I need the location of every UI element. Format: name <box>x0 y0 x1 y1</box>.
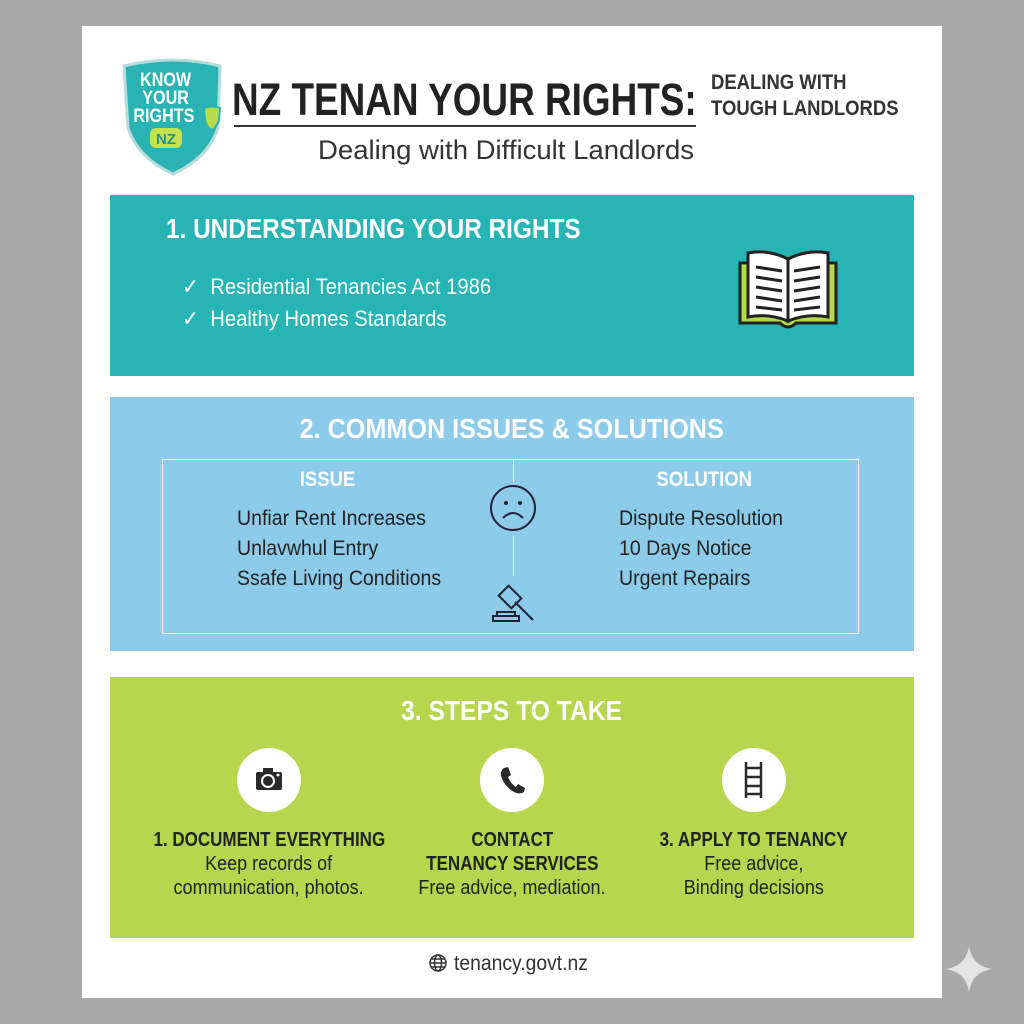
table box <box>162 459 859 634</box>
title: NZ TENAN YOUR RIGHTS: <box>232 74 697 125</box>
step 1: communication, photos. <box>174 877 364 899</box>
panel: steps to take <box>110 677 914 938</box>
step 2 <box>418 748 606 899</box>
issue column: ISSUE <box>300 468 356 491</box>
issue column: Unlavwhul Entry <box>237 537 378 560</box>
card <box>82 26 942 998</box>
icon: sad face <box>490 485 536 531</box>
step 2: CONTACT <box>471 829 553 851</box>
logo badge: KNOW <box>140 69 191 90</box>
step 3: Binding decisions <box>684 877 824 899</box>
checklist: ✓ Healthy Homes Standards <box>182 306 446 331</box>
panel: common issues and solutions <box>110 397 914 651</box>
icon: gavel <box>492 584 534 622</box>
solution column: 10 Days Notice <box>619 537 751 560</box>
step 1 <box>153 748 385 899</box>
heading: 1. UNDERSTANDING YOUR RIGHTS <box>166 213 581 244</box>
step 1: Keep records of <box>205 853 333 875</box>
footer url: tenancy.govt.nz <box>454 952 588 975</box>
solution column: SOLUTION <box>656 468 752 491</box>
step 1: 1. DOCUMENT EVERYTHING <box>153 829 385 851</box>
solution column <box>619 468 783 590</box>
step 3: Free advice, <box>704 853 804 875</box>
solution column: Urgent Repairs <box>619 567 750 590</box>
step 2: Free advice, mediation. <box>418 877 606 899</box>
step 2: TENANCY SERVICES <box>426 853 598 875</box>
logo badge: RIGHTS <box>133 105 195 126</box>
issue column: Unfiar Rent Increases <box>237 507 426 530</box>
logo badge <box>122 58 222 176</box>
step 3: 3. APPLY TO TENANCY <box>660 829 848 851</box>
title side text <box>711 71 899 120</box>
icon: book <box>738 250 838 329</box>
checklist: ✓ Residential Tenancies Act 1986 <box>182 274 491 299</box>
issue column: Ssafe Living Conditions <box>237 567 441 590</box>
title underline <box>234 125 696 127</box>
issue column <box>237 468 441 590</box>
heading: 3. STEPS TO TAKE <box>402 695 622 726</box>
title side text: TOUGH LANDLORDS <box>711 97 899 120</box>
icon: sparkle <box>946 946 992 992</box>
solution column: Dispute Resolution <box>619 507 783 530</box>
title side text: DEALING WITH <box>711 71 847 94</box>
icon: phone <box>480 748 544 812</box>
step 3 <box>660 748 848 899</box>
logo badge: YOUR <box>142 87 189 108</box>
icon: camera <box>237 748 301 812</box>
heading: 2. COMMON ISSUES & SOLUTIONS <box>300 413 724 444</box>
panel: understanding your rights <box>110 195 914 376</box>
checklist <box>182 274 491 331</box>
icon: ladder <box>722 748 786 812</box>
logo badge: NZ <box>156 131 176 148</box>
subtitle: Dealing with Difficult Landlords <box>318 135 694 165</box>
